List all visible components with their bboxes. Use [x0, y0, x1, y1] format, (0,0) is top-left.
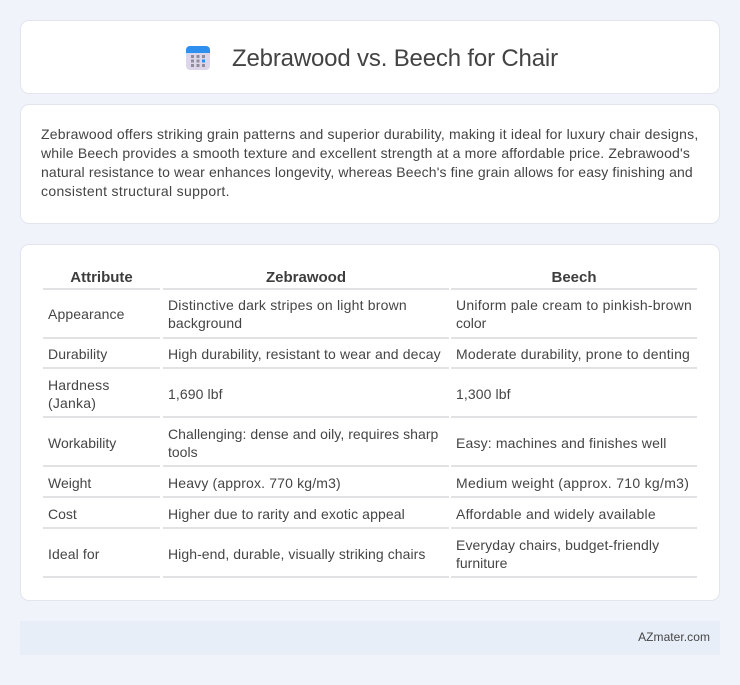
row: appearance: Appearance	[48, 306, 125, 322]
summary text: Zebrawood offers striking grain patterns and superior durability, making it ideal for luxury chair designs,	[41, 126, 698, 142]
row: ideal for	[48, 537, 660, 571]
row: ideal for: High-end, durable, visually striking chairs	[168, 546, 425, 562]
row: workability: Challenging: dense and oily, requires sharp	[168, 426, 438, 442]
row: durability	[48, 346, 690, 362]
column headings: Zebrawood	[266, 269, 346, 286]
row: ideal for: Ideal for	[48, 546, 100, 562]
row: durability: Moderate durability, prone to denting	[456, 346, 690, 362]
row: cost	[48, 506, 656, 522]
row: appearance: background	[168, 315, 242, 331]
row: appearance: Distinctive dark stripes on light brown	[168, 297, 407, 313]
footer credit: AZmater.com	[638, 630, 710, 644]
row: appearance: color	[456, 315, 486, 331]
table	[43, 269, 697, 578]
row: weight	[48, 475, 689, 491]
row: workability	[48, 426, 667, 460]
row: appearance	[48, 297, 692, 331]
summary text	[41, 126, 698, 199]
row: hardness: 1,690 lbf	[168, 386, 223, 402]
row: appearance: Uniform pale cream to pinkish-brown	[456, 297, 692, 313]
row: hardness: 1,300 lbf	[456, 386, 511, 402]
summary text: while Beech provides a smooth texture and excellent strength at a more affordable price. Zebrawood's	[41, 145, 690, 161]
row: cost: Higher due to rarity and exotic appeal	[168, 506, 405, 522]
row: durability: Durability	[48, 346, 107, 362]
panel: header	[20, 20, 720, 94]
row: ideal for: furniture	[456, 555, 507, 571]
row: weight: Weight	[48, 475, 91, 491]
row: durability: High durability, resistant to wear and decay	[168, 346, 441, 362]
column headings	[70, 269, 597, 286]
panel: comparison table	[20, 244, 720, 601]
panel: summary	[20, 104, 720, 224]
footer bar	[20, 621, 720, 655]
row: cost: Cost	[48, 506, 77, 522]
row: weight: Medium weight (approx. 710 kg/m3)	[456, 475, 689, 491]
summary text: consistent structural support.	[41, 183, 230, 199]
row: weight: Heavy (approx. 770 kg/m3)	[168, 475, 341, 491]
row: cost: Affordable and widely available	[456, 506, 656, 522]
title: Zebrawood vs. Beech for Chair	[232, 45, 558, 72]
icon: calendar	[186, 46, 210, 70]
column headings: Attribute	[70, 269, 133, 286]
summary text: natural resistance to wear enhances longevity, whereas Beech's fine grain allows for easy finishing and	[41, 164, 693, 180]
row: hardness	[48, 377, 511, 411]
row: hardness: (Janka)	[48, 395, 96, 411]
row: workability: Workability	[48, 435, 116, 451]
row: workability: tools	[168, 444, 198, 460]
column headings: Beech	[551, 269, 597, 286]
row: ideal for: Everyday chairs, budget-friendly	[456, 537, 659, 553]
row: workability: Easy: machines and finishes well	[456, 435, 667, 451]
row: hardness: Hardness	[48, 377, 110, 393]
